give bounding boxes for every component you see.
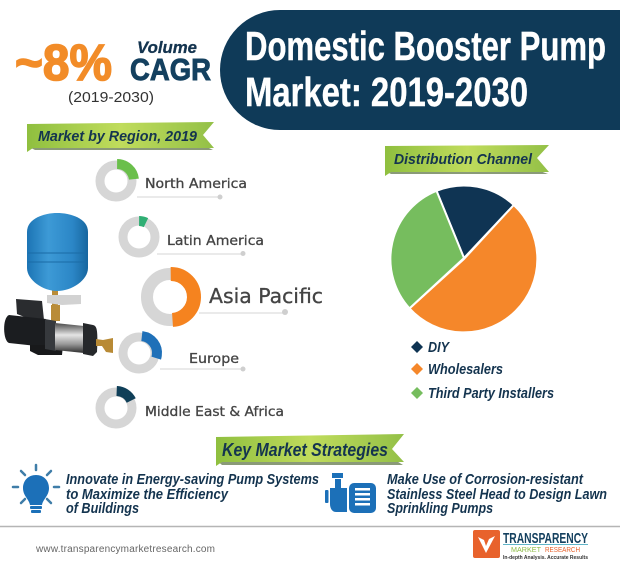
donut: Europe [121,334,246,372]
slice: Wholesalers [410,205,537,332]
pie chart: distribution channel [390,185,537,332]
CAGR callout: CAGR [130,52,211,87]
illustration: booster pump with tank [4,213,113,356]
donut: Middle East and Africa [98,390,284,426]
slice: Third Party Installers [390,191,464,308]
heading ribbon: market by region: Market by Region, 2019 [38,128,198,145]
legend: distribution channel [411,339,554,402]
slice: DIY [436,185,514,258]
title banner: Market: 2019-2030 [245,69,528,115]
text: energy-saving strategy: of Buildings [66,500,139,517]
donut: Latin America: Latin America [167,233,264,249]
logo: Transparency Market Research [473,530,588,561]
CAGR callout: (2019-2030) [68,89,154,106]
logo: Transparency Market Research: RESEARCH [545,547,580,554]
icon: light bulb [13,465,59,513]
text: energy-saving strategy: to Maximize the Efficiency [66,486,229,503]
heading ribbon: key market strategies [216,434,404,466]
text: stainless steel strategy: Sprinkling Pumps [387,500,493,517]
heading ribbon: distribution channel [385,145,549,176]
text: stainless steel strategy [387,471,607,517]
heading ribbon: distribution channel: Distribution Channel [394,151,533,168]
CAGR callout [15,34,211,106]
donut: Middle East and Africa: Middle East & Africa [145,404,284,420]
legend: distribution channel: Third Party Installers [428,385,554,402]
donut: North America [99,163,247,200]
text: energy-saving strategy: Innovate in Energy-saving Pump Systems [66,471,319,488]
donut: Asia Pacific: Asia Pacific [209,284,323,308]
donut: Europe: Europe [189,351,239,367]
heading ribbon: market by region [27,122,214,152]
website url: www.transparencymarketresearch.com [35,544,215,555]
donut: Asia Pacific [147,274,323,320]
CAGR callout: Volume [137,38,197,57]
text: energy-saving strategy [66,471,319,517]
CAGR callout: ~8% [15,34,112,91]
logo: Transparency Market Research: MARKET [511,547,542,554]
icon: pump [325,473,376,513]
legend: distribution channel: Wholesalers [428,361,503,378]
heading ribbon: key market strategies: Key Market Strategies [222,440,388,460]
donut: North America: North America [145,176,247,192]
title banner [220,10,620,130]
text: stainless steel strategy: Make Use of Corrosion-resistant [387,471,584,488]
logo: Transparency Market Research: In-depth Analysis. Accurate Results [503,555,588,561]
legend: distribution channel: DIY [428,339,451,356]
donut: Latin America [122,220,264,256]
